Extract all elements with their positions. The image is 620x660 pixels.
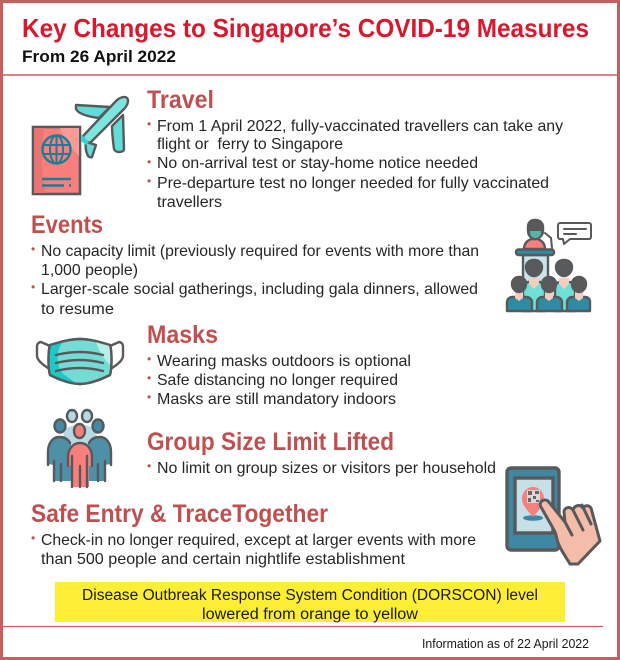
heading: masks: Masks [147, 321, 218, 349]
text block: masks bullets: Masks are still mandatory indoors [157, 391, 396, 408]
panel: travel [147, 86, 563, 211]
text block: safe entry bullets: Check-in no longer required, except at larger events with more [41, 532, 476, 549]
text block: events bullets [31, 242, 479, 318]
text block: safe entry bullets: than 500 people and certain nightlife establishment [41, 551, 406, 568]
callout: dorscon level: lowered from orange to yellow [202, 606, 419, 623]
text block: masks bullets: • [147, 371, 151, 385]
heading: events: Events [31, 211, 103, 239]
text block: travel bullets: flight or ferry to Singapore [157, 136, 343, 153]
text block: masks bullets: • [147, 390, 151, 404]
text block: events bullets: Larger-scale social gatherings, including gala dinners, allowed [41, 281, 478, 298]
text block: safe entry bullets: • [31, 531, 35, 545]
icon: plane [76, 97, 128, 157]
text block: travel bullets [147, 117, 563, 211]
text block: events bullets: • [31, 280, 35, 294]
subtitle: From 26 April 2022 [22, 47, 176, 66]
callout: dorscon level [55, 582, 565, 623]
icon: passport and plane [33, 97, 128, 194]
icon: group of people [48, 410, 111, 487]
text block: safe entry bullets [31, 531, 476, 568]
icon: face mask [37, 339, 123, 384]
heading: travel: Travel [147, 86, 214, 114]
icon: phone with hand [507, 468, 600, 564]
text block: masks bullets: Wearing masks outdoors is optional [157, 353, 411, 370]
icon: speaker and audience [507, 220, 591, 311]
text block: travel bullets: • [147, 117, 151, 131]
text block: events bullets: No capacity limit (previously required for events with more than [41, 243, 479, 260]
panel: masks [147, 321, 411, 408]
footer note: Information as of 22 April 2022 [422, 637, 589, 651]
icon: speech bubble [558, 223, 591, 244]
panel: events [31, 211, 479, 318]
text block: travel bullets: From 1 April 2022, fully-vaccinated travellers can take any [157, 118, 563, 135]
heading: group size limit lifted: Group Size Limit Lifted [147, 428, 394, 456]
text block: events bullets: 1,000 people) [41, 262, 138, 279]
text block: group size bullet: • [147, 459, 151, 473]
text block: events bullets: • [31, 242, 35, 256]
text block: masks bullets [147, 352, 411, 408]
text block: travel bullets: • [147, 174, 151, 188]
panel: group size limit [147, 428, 496, 477]
text block: travel bullets: No on-arrival test or stay-home notice needed [157, 155, 478, 172]
text block: group size bullet: No limit on group sizes or visitors per household [157, 460, 496, 477]
text block: travel bullets: travellers [157, 194, 222, 211]
heading: safe entry and tracetogether: Safe Entry & TraceTogether [31, 500, 328, 528]
text block: travel bullets: • [147, 155, 151, 169]
callout: dorscon level: Disease Outbreak Response System Condition (DORSCON) level [82, 587, 538, 604]
panel: safe entry and tracetogether [31, 500, 476, 568]
text block: travel bullets: Pre-departure test no longer needed for fully vaccinated [157, 175, 549, 192]
text block: masks bullets: • [147, 352, 151, 366]
icon: passport [33, 127, 80, 194]
text block: events bullets: to resume [41, 301, 114, 318]
text block: masks bullets: Safe distancing no longer required [157, 372, 398, 389]
title: Key Changes to Singapore’s COVID-19 Measures [22, 13, 589, 43]
